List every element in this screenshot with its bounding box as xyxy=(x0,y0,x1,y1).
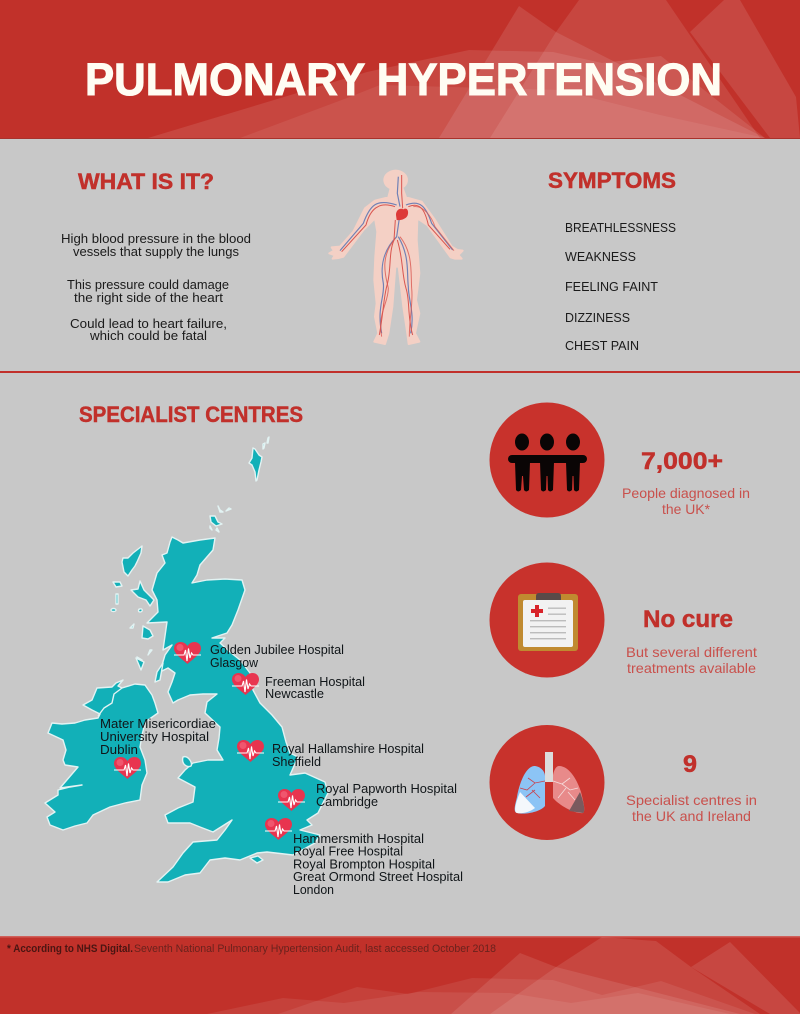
panel: symptoms xyxy=(548,168,676,353)
symptom list: BREATHLESSNESS xyxy=(565,220,676,235)
symptom list: DIZZINESS xyxy=(565,310,630,325)
stat: no cure: treatments available xyxy=(627,660,756,676)
stat: no cure xyxy=(626,606,757,676)
hospital: Golden Jubilee xyxy=(174,642,344,670)
mull xyxy=(131,581,154,606)
text block: damage: This pressure could damage xyxy=(67,277,229,292)
hospital: Mater Misericordiae xyxy=(100,716,216,779)
stat: 9 centres: the UK and Ireland xyxy=(632,808,751,824)
symptom list: WEAKNESS xyxy=(565,249,636,264)
symptom list: FEELING FAINT xyxy=(565,279,658,294)
skye xyxy=(122,546,142,576)
hospital: Royal Hallamshire: Sheffield xyxy=(272,754,321,769)
stat: 7,000+: People diagnosed in xyxy=(622,485,750,501)
hospital: Golden Jubilee: Glasgow xyxy=(210,655,259,670)
hospital: Royal Papworth: Royal Papworth Hospital xyxy=(316,781,457,796)
title: PULMONARY HYPERTENSION xyxy=(85,54,722,105)
stat: no cure: But several different xyxy=(626,644,757,660)
text block: heart failure: Could lead to heart failure, xyxy=(70,316,227,331)
text block: damage: the right side of the heart xyxy=(74,290,223,305)
icon: lungs in red circle xyxy=(490,725,604,840)
hospital: Golden Jubilee: Golden Jubilee Hospital xyxy=(210,642,344,657)
footnote: Seventh National Pulmonary Hypertension Audit, last accessed October 2018 xyxy=(134,943,496,955)
hospital: Mater Misericordiae: University Hospital xyxy=(100,729,209,744)
isle of wight xyxy=(250,856,263,863)
hospitals: London: London xyxy=(293,882,334,897)
icon: clipboard in red circle xyxy=(490,562,604,678)
symptom list xyxy=(565,220,676,353)
footnote: * According to NHS Digital. xyxy=(7,943,133,955)
hospital: Royal Papworth: Cambridge xyxy=(316,794,378,809)
stat: 9 centres: 9 xyxy=(683,751,697,778)
panel: what is it xyxy=(61,169,251,343)
anglesey xyxy=(183,757,191,767)
icon: human circulatory system xyxy=(329,170,463,344)
hospital: Freeman: Newcastle xyxy=(265,686,324,701)
stat: 7,000+: the UK* xyxy=(662,501,711,517)
hospitals: London xyxy=(265,818,463,897)
heading: specialist centres: SPECIALIST CENTRES xyxy=(79,402,303,427)
hospitals: London: Hammersmith Hospital xyxy=(293,831,424,846)
hospitals: London: Great Ormond Street Hospital xyxy=(293,869,463,884)
stat: 7,000+: 7,000+ xyxy=(641,448,723,475)
map: UK and Ireland xyxy=(45,437,328,882)
symptom list: CHEST PAIN xyxy=(565,338,639,353)
icon: people in red circle xyxy=(490,402,604,518)
hospitals: London: Royal Free Hospital xyxy=(293,844,403,858)
text block: definition: vessels that supply the lungs xyxy=(73,244,239,259)
shetland xyxy=(249,448,262,481)
northern ireland border xyxy=(98,688,122,716)
hospital: Freeman xyxy=(232,673,365,701)
hospitals: London: Royal Brompton Hospital xyxy=(293,856,435,872)
hospital: Royal Papworth xyxy=(278,781,457,811)
heading: what is it: WHAT IS IT? xyxy=(78,169,214,194)
header banner xyxy=(0,0,800,139)
hospital: Royal Hallamshire: Royal Hallamshire Hospital xyxy=(272,741,424,756)
hospital: Royal Hallamshire xyxy=(237,740,424,769)
text block: definition: High blood pressure in the blood xyxy=(61,231,251,246)
text block: heart failure xyxy=(70,316,227,343)
ireland xyxy=(45,680,158,830)
heading: symptoms: SYMPTOMS xyxy=(548,168,676,193)
kintyre and arran xyxy=(137,657,143,664)
hospital: Mater Misericordiae: Dublin xyxy=(100,742,138,757)
stat: no cure: No cure xyxy=(643,606,733,633)
hospital: Freeman: Freeman Hospital xyxy=(265,674,365,689)
orkney xyxy=(210,516,222,526)
hospital: Mater Misericordiae: Mater Misericordiae xyxy=(100,716,216,731)
great britain xyxy=(147,537,328,882)
text block: heart failure: which could be fatal xyxy=(89,328,207,343)
footer banner xyxy=(0,936,800,1014)
stat: 9 centres: Specialist centres in xyxy=(626,792,757,808)
stat: 9 centres xyxy=(626,751,757,824)
text block: damage xyxy=(67,277,229,305)
outer hebrides xyxy=(113,582,122,587)
stat: 7,000+ xyxy=(622,448,750,517)
text block: definition xyxy=(61,231,251,259)
